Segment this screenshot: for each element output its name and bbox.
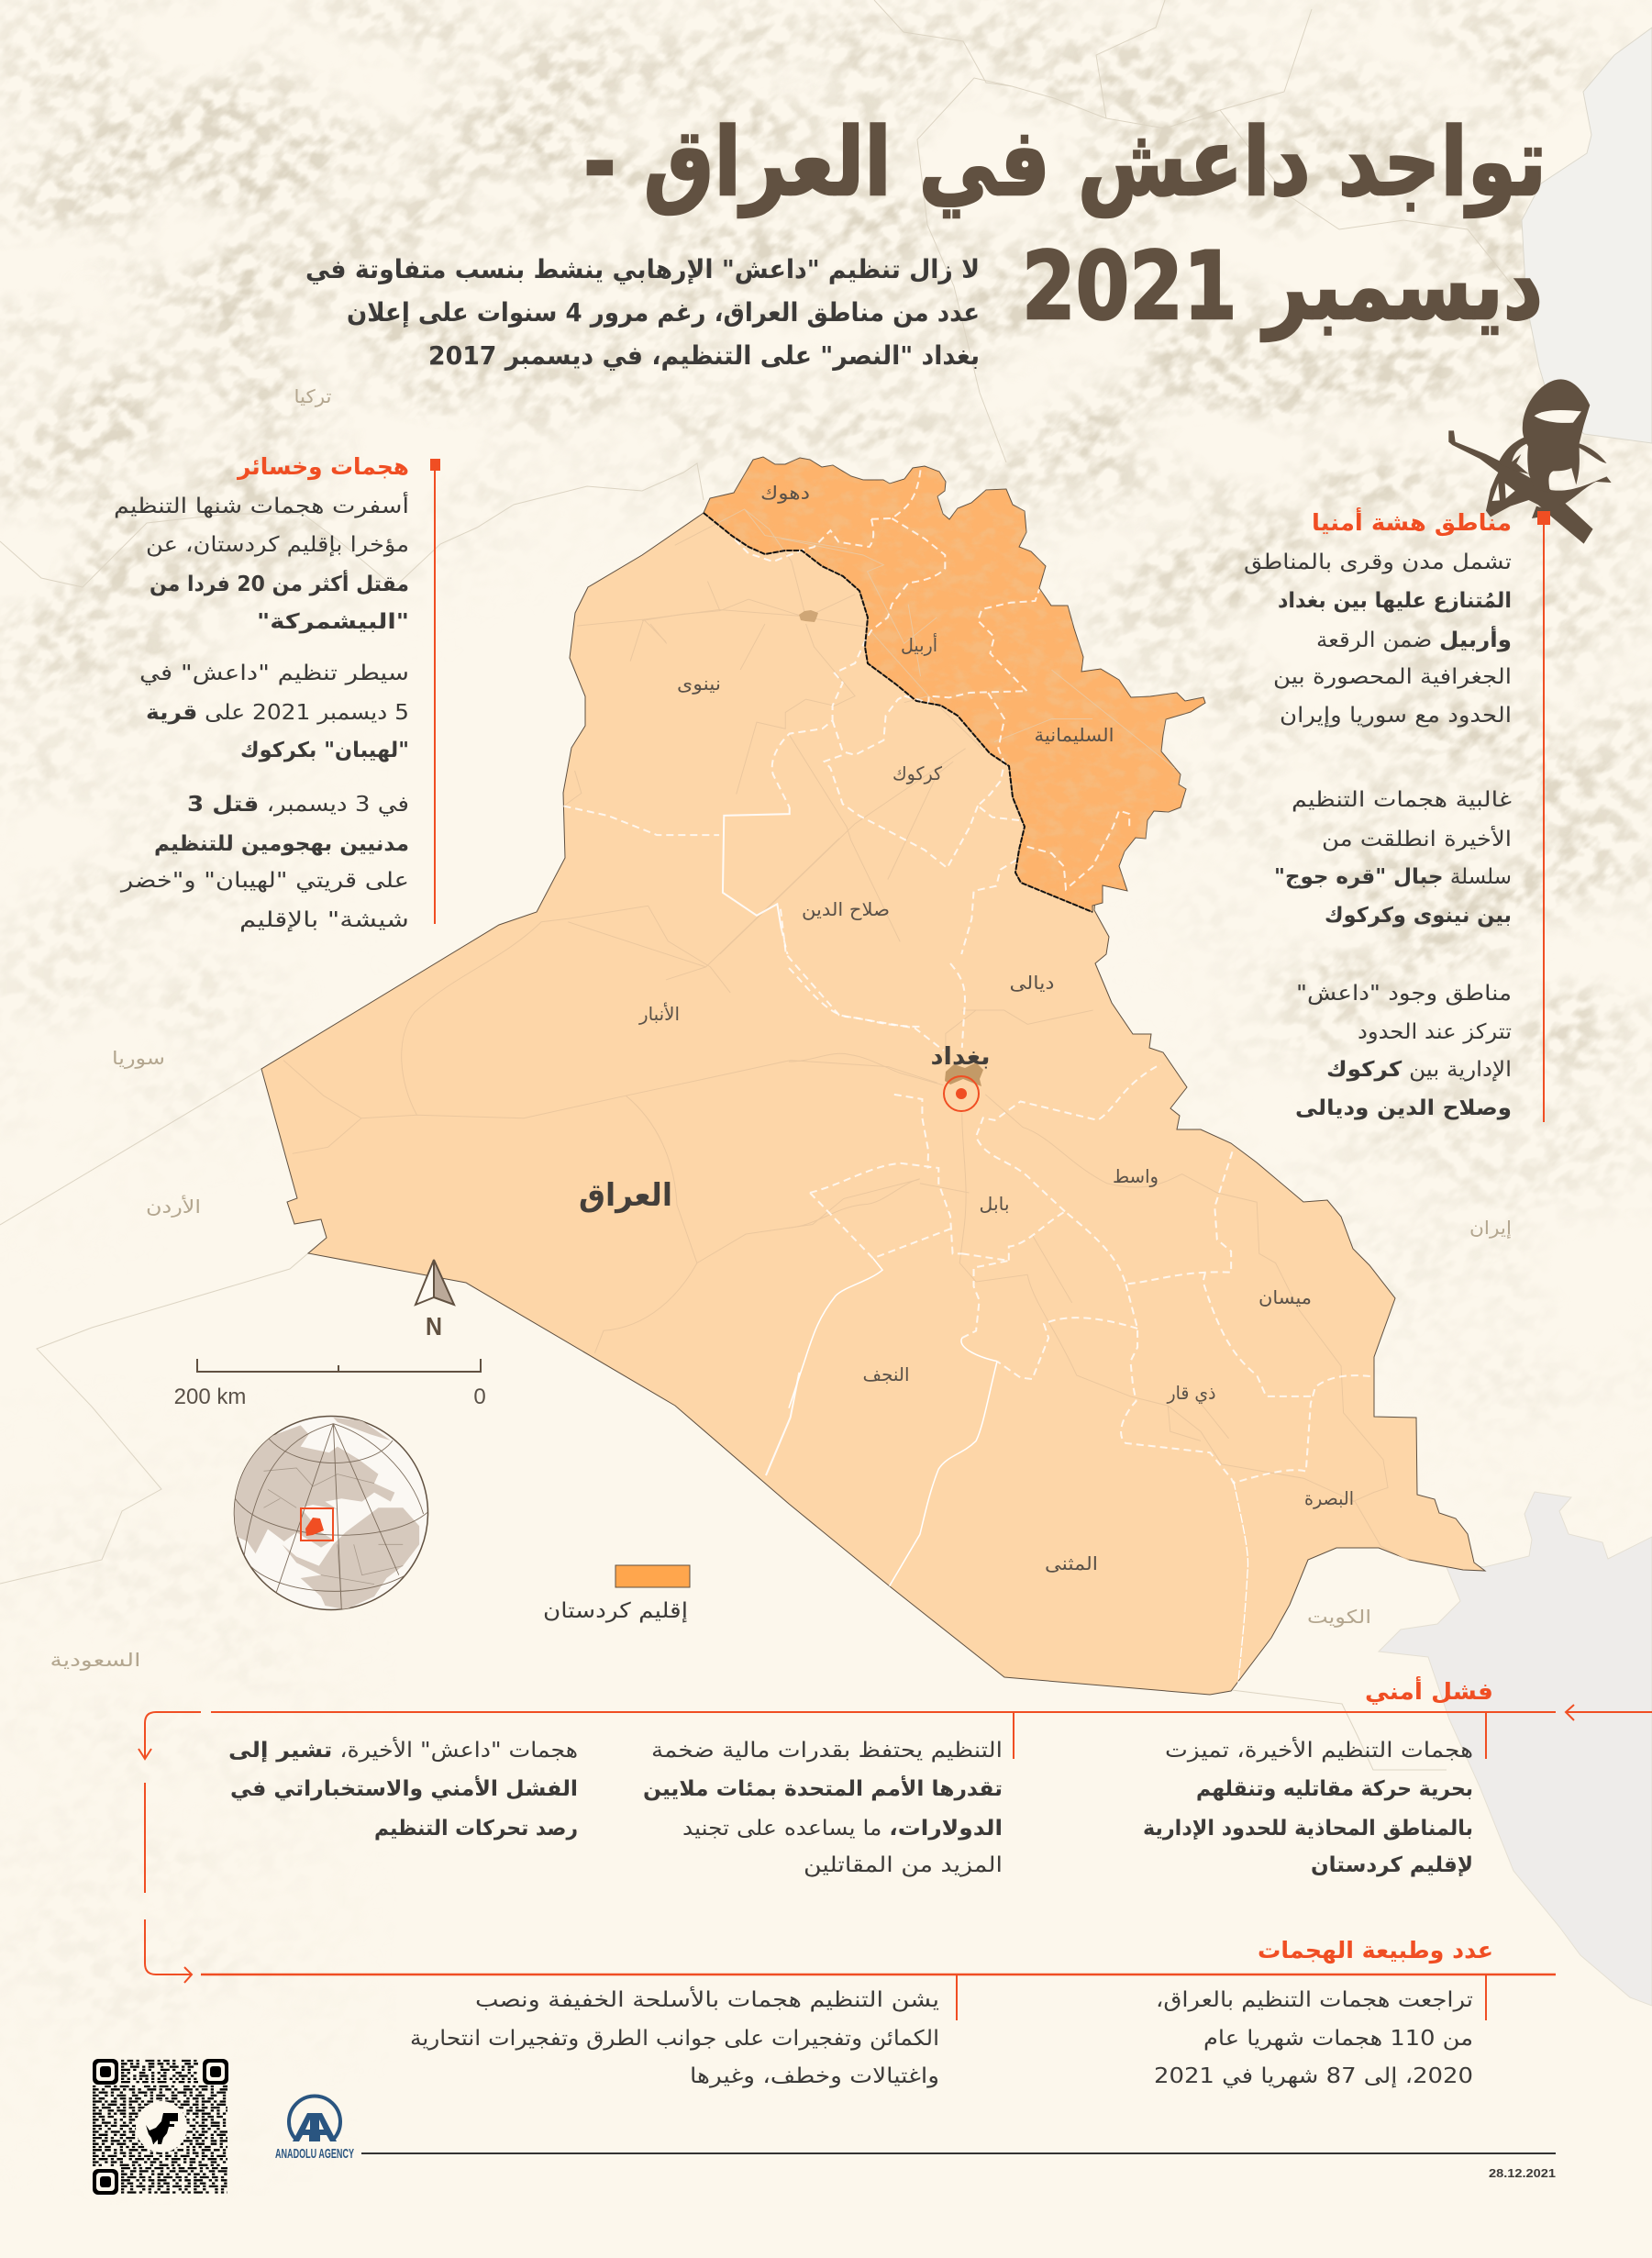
map labels: العراق — [579, 1177, 672, 1214]
panel: attacks and losses — [114, 453, 440, 932]
panel line marker — [1537, 511, 1550, 1122]
map labels — [579, 482, 1354, 1574]
intro text — [305, 254, 980, 371]
footer rule — [361, 2152, 1556, 2154]
panel: attacks and losses: مقتل أكثر من 20 فردا من — [150, 569, 409, 596]
map labels: البصرة — [1304, 1487, 1354, 1509]
panel: hotspots: تتركز عند الحدود — [1358, 1020, 1512, 1044]
intro text: عدد من مناطق العراق، رغم مرور 4 سنوات على إعلان — [347, 297, 980, 328]
panel: attacks and losses: مؤخرا بإقليم كردستان، عن — [146, 533, 409, 557]
panel: security failure columns — [228, 1737, 1473, 1877]
date: 28.12.2021 — [1489, 2166, 1556, 2180]
roads and governorate lines north — [642, 470, 1174, 954]
map labels: أربيل — [901, 633, 937, 656]
heading: security failure: فشل أمني — [1365, 1676, 1493, 1705]
map labels: كركوك — [893, 762, 942, 784]
marker: Baghdad — [944, 1076, 979, 1111]
neighbouring country labels: الأردن — [146, 1196, 201, 1218]
map labels: النجف — [862, 1363, 910, 1385]
panel: security failure columns: تقدرها الأمم المتحدة بمئات ملايين — [643, 1774, 1003, 1801]
panel: hotspots: بين نينوى وكركوك — [1325, 904, 1512, 928]
panel: security failure columns: بحرية حركة مقاتليه وتنقلهم — [1196, 1777, 1473, 1801]
panel: security failure columns: المزيد من المقاتلين — [804, 1853, 1003, 1877]
map labels: صلاح الدين — [802, 898, 890, 920]
logo: Anadolu Agency — [275, 2096, 354, 2162]
heading: number and nature of attacks: عدد وطبيعة الهجمات — [1258, 1937, 1493, 1964]
panel: attacks and losses: على قريتي "لهيبان" و"خضر — [120, 869, 409, 893]
panel: number and nature columns: تراجعت هجمات التنظيم بالعراق، — [1156, 1988, 1473, 2012]
panel: attacks and losses: هجمات وخسائر — [236, 453, 409, 481]
scale bar: 0 — [473, 1385, 486, 1409]
city: Mosul — [799, 610, 818, 622]
map labels: نينوى — [677, 673, 721, 695]
roads and governorate lines south — [789, 963, 1409, 1685]
panel: number and nature columns — [410, 1986, 1473, 2088]
map labels: ديالى — [1009, 972, 1055, 994]
panel: hotspots: الحدود مع سوريا وإيران — [1280, 704, 1512, 728]
panel: security failure columns: لإقليم كردستان — [1311, 1853, 1473, 1877]
map labels: بابل — [980, 1193, 1009, 1215]
map labels: المثنى — [1045, 1552, 1098, 1574]
panel: attacks and losses: في 3 ديسمبر، قتل 3 — [187, 793, 409, 817]
panel: hotspots: المُتنازع عليها بين بغداد — [1278, 589, 1512, 613]
panel: number and nature columns: واغتيالات وخطف، وغيرها — [690, 2064, 939, 2088]
panel: security failure columns: بالمناطق المحاذية للحدود الإدارية — [1143, 1817, 1473, 1841]
panel: attacks and losses: "لهيبان" بكركوك — [240, 739, 409, 762]
neighbouring borders — [0, 0, 1526, 1770]
panel: hotspots: تشمل مدن وقرى بالمناطق — [1244, 551, 1512, 574]
panel: security failure columns: رصد تحركات التنظيم — [374, 1817, 578, 1841]
inset globe — [227, 1417, 427, 1609]
panel: number and nature columns: يشن التنظيم هجمات بالأسلحة الخفيفة ونصب — [475, 1986, 939, 2012]
compass: north arrow — [416, 1260, 454, 1340]
title — [583, 108, 1547, 341]
sea: north — [1522, 28, 1652, 443]
Kurdistan region — [704, 457, 1205, 912]
panel: hotspots: الجغرافية المحصورة بين — [1273, 665, 1512, 689]
panel: hotspots: مناطق وجود "داعش" — [1296, 982, 1512, 1006]
panel: hotspots: وأربيل ضمن الرقعة — [1316, 625, 1512, 652]
logo: Anadolu Agency: ANADOLU AGENCY — [275, 2146, 354, 2162]
panel: number and nature columns: من 110 هجمات شهريا عام — [1203, 2027, 1473, 2051]
legend: Kurdistan region: إقليم كردستان — [543, 1599, 688, 1623]
panel: hotspots: الأخيرة انطلقت من — [1322, 826, 1512, 851]
map labels: ذي قار — [1167, 1382, 1216, 1405]
neighbouring country labels: سوريا — [112, 1047, 165, 1069]
dinosaur — [136, 2101, 187, 2152]
panel: number and nature columns: الكمائن وتفجيرات على جوانب الطرق وتفجيرات انتحارية — [410, 2027, 939, 2051]
map labels: بغداد — [930, 1043, 991, 1071]
map labels: الأنبار — [638, 1003, 680, 1025]
panel: attacks and losses: 5 ديسمبر 2021 على قرية — [146, 701, 409, 725]
panel: hotspots: مناطق هشة أمنيا — [1312, 507, 1512, 537]
neighbouring country labels — [50, 385, 1512, 1671]
intro text: بغداد "النصر" على التنظيم، في ديسمبر 2017 — [428, 340, 980, 371]
section arrows and rules — [139, 1705, 1652, 2020]
icon: masked fighter — [1448, 379, 1612, 544]
panel line marker — [430, 459, 440, 924]
panel: attacks and losses: شيشة" بالإقليم — [239, 908, 409, 932]
neighbouring country labels: السعودية — [50, 1649, 141, 1671]
panel: security failure columns: هجمات "داعش" الأخيرة، تشير إلى — [228, 1737, 578, 1763]
neighbouring country labels: تركيا — [294, 385, 332, 407]
map labels: ميسان — [1258, 1286, 1312, 1308]
map labels: السليمانية — [1035, 724, 1114, 746]
intro text: لا زال تنظيم "داعش" الإرهابي ينشط بنسب متفاوتة في — [305, 254, 980, 284]
panel: number and nature columns: 2020، إلى 87 شهريا في 2021 — [1154, 2064, 1473, 2088]
sea: gulf — [1379, 1492, 1652, 2006]
compass: north arrow: N — [426, 1312, 442, 1340]
panel: attacks and losses: سيطر تنظيم "داعش" في — [139, 662, 409, 685]
roads and lines west — [283, 610, 944, 1475]
panel: hotspots: سلسلة جبال "قره جوج" — [1274, 865, 1512, 889]
Iraq territory — [261, 486, 1485, 1695]
panel: security failure columns: الفشل الأمني والاستخباراتي في — [230, 1774, 578, 1801]
panel: hotspots — [1244, 507, 1550, 1122]
neighbouring country labels: إيران — [1469, 1217, 1512, 1240]
map labels: دهوك — [760, 482, 810, 504]
legend: Kurdistan region — [543, 1565, 690, 1623]
panel: attacks and losses: أسفرت هجمات شنها التنظيم — [114, 492, 409, 518]
locator box — [301, 1508, 333, 1541]
panel: security failure columns: هجمات التنظيم الأخيرة، تميزت — [1165, 1737, 1473, 1763]
panel: attacks and losses: "البيشمركة" — [257, 610, 409, 634]
map labels: واسط — [1113, 1165, 1159, 1187]
panel: security failure columns: الدولارات، ما يساعده على تجنيد — [682, 1817, 1003, 1841]
panel: attacks and losses: مدنيين بهجومين للتنظيم — [154, 832, 409, 856]
neighbouring country labels: الكويت — [1307, 1606, 1371, 1628]
panel: hotspots: غالبية هجمات التنظيم — [1292, 788, 1512, 812]
panel: hotspots: الإدارية بين كركوك — [1326, 1058, 1512, 1082]
panel: hotspots: وصلاح الدين وديالى — [1295, 1096, 1512, 1120]
QR code — [93, 2059, 228, 2195]
Kurdistan border — [704, 513, 1092, 912]
title: ديسمبر 2021 — [1022, 232, 1543, 341]
scale bar: 200 km — [174, 1385, 246, 1409]
city: Baghdad area — [945, 1062, 983, 1086]
finder patterns — [93, 2059, 228, 2195]
scale bar — [174, 1359, 486, 1409]
panel: security failure columns: التنظيم يحتفظ بقدرات مالية ضخمة — [651, 1739, 1003, 1763]
